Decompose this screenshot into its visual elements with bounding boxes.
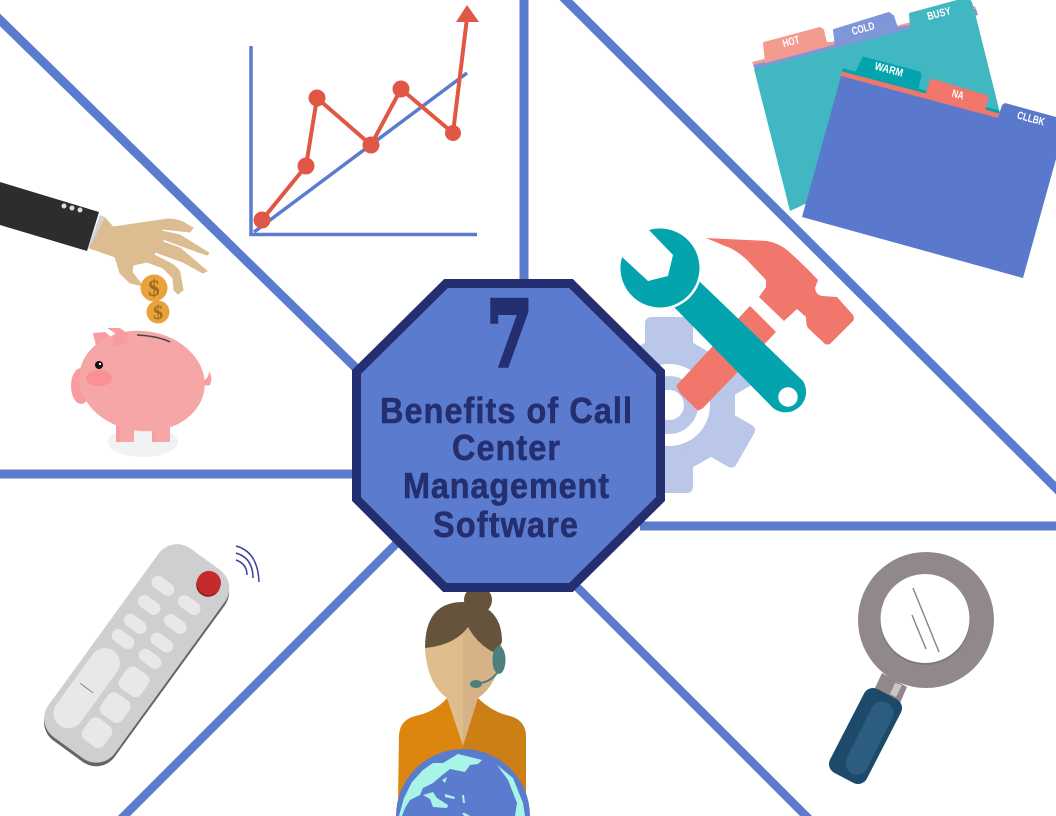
line chart: rising trend [251,5,479,234]
icon: wrench [618,226,806,412]
icon: piggy bank [71,323,211,457]
icon: hand dropping coins: $ [153,302,163,324]
icon: gear [581,317,757,493]
icon: file folders: CLLBK [1016,110,1046,129]
icon: file folders: BUSY [926,5,953,23]
title text: Benefits of Call [380,391,632,431]
icon: file folders [752,0,1056,278]
title text: Management [403,466,609,506]
icon: file folders: WARM [873,61,904,80]
title text: Center [452,428,560,468]
icon: magnifying glass [839,552,994,774]
icon: remote control [33,535,240,775]
panel: central octagon title [356,281,660,588]
icon: hand dropping coins [0,182,209,324]
icon: hand dropping coins: $ [148,276,160,301]
icon: file folders: COLD [851,20,876,38]
icon: file folders: NA [950,88,965,102]
icon: file folders: HOT [781,34,801,50]
title text [380,391,632,545]
title text: Software [433,505,578,545]
icon: call center agent with globe [396,586,530,816]
number 7: 7 [487,281,532,386]
icon: hammer [678,238,854,409]
icon: signal waves [236,546,259,582]
